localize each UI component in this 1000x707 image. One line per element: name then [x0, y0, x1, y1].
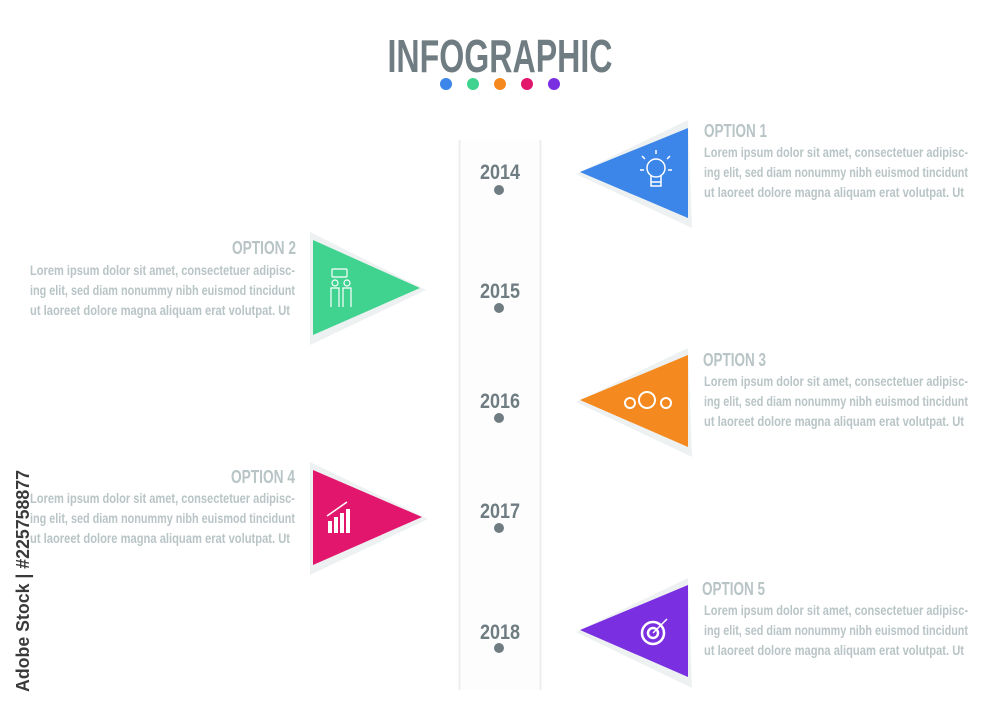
text: option 3 — [703, 350, 968, 429]
triangle: option 2 — [310, 232, 426, 345]
watermark id: Adobe Stock | #225758877 — [13, 470, 33, 692]
text: option 1: OPTION 1 — [704, 121, 767, 141]
text: option 2: OPTION 2 — [232, 238, 296, 258]
text: option 5: OPTION 5 — [702, 579, 765, 599]
text: option 3: OPTION 3 — [703, 350, 766, 370]
years: 2014 — [480, 161, 520, 184]
text: option 5 — [702, 579, 968, 658]
triangle: option 4 — [310, 462, 428, 575]
text: option 4: ing elit, sed diam nonummy nibh euismod tincidunt — [30, 510, 295, 526]
years — [480, 161, 520, 653]
text: option 1 — [704, 121, 968, 200]
years: 2018 — [480, 621, 520, 644]
text: option 4 — [30, 467, 295, 546]
triangle: option 1 — [576, 120, 692, 228]
triangle: option 5 — [576, 578, 692, 688]
text: option 4: OPTION 4 — [231, 467, 295, 487]
text: option 2: ut laoreet dolore magna aliquam erat volutpat. Ut — [30, 302, 290, 318]
triangle: option 3 — [576, 348, 692, 457]
years: 2015 — [480, 280, 520, 303]
text: option 4: ut laoreet dolore magna aliquam erat volutpat. Ut — [30, 530, 290, 546]
text: option 2 — [30, 238, 296, 318]
timeline column — [459, 140, 541, 690]
years: 2017 — [480, 500, 520, 523]
text: option 2: Lorem ipsum dolor sit amet, consectetuer adipisc- — [30, 262, 295, 278]
title: INFOGRAPHIC — [388, 30, 612, 82]
years: 2016 — [480, 390, 520, 413]
text: option 4: Lorem ipsum dolor sit amet, consectetuer adipisc- — [30, 490, 295, 506]
color dots — [440, 78, 560, 90]
text: option 2: ing elit, sed diam nonummy nibh euismod tincidunt — [30, 282, 295, 298]
